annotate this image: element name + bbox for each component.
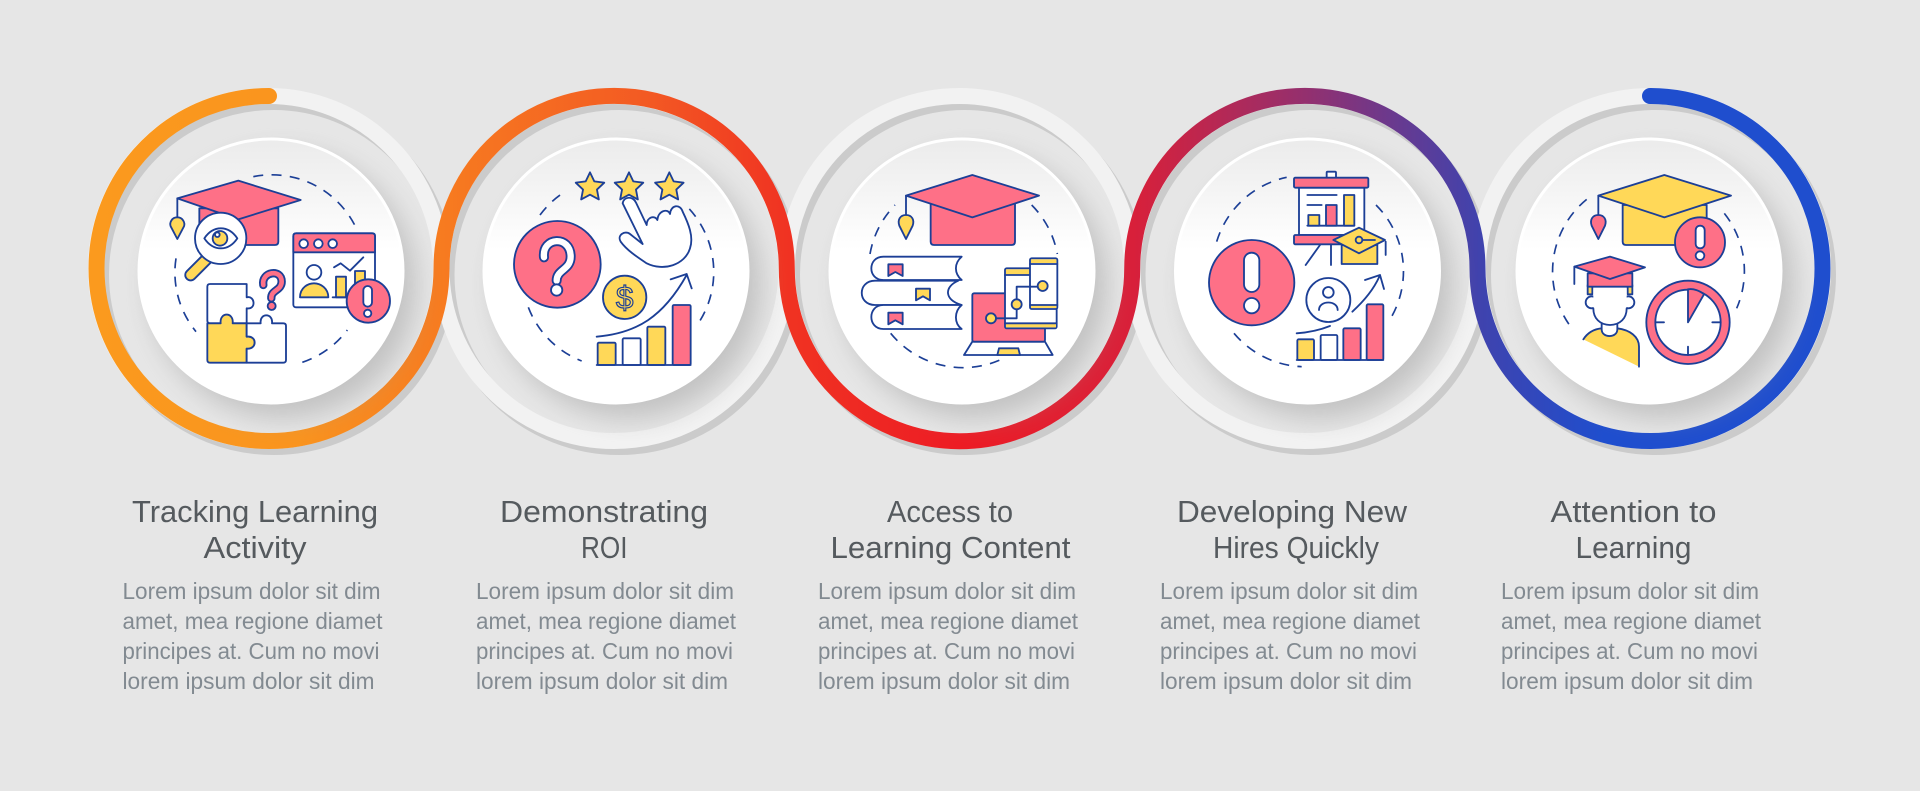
text block: step 5 description: amet, mea regione diamet	[1501, 608, 1762, 634]
text block: step 4 description: amet, mea regione diamet	[1160, 608, 1421, 634]
heading: Developing New Hires Quickly: Hires Quickly	[1213, 530, 1379, 565]
panel: step 3 access to learning content	[818, 139, 1107, 694]
loop track: pale rings with hard shadows	[96, 96, 1828, 447]
heading: Access to Learning Content	[830, 494, 1071, 565]
text block: step 2 description: principes at. Cum no movi	[476, 638, 733, 664]
text block: step 2 description: amet, mea regione diamet	[476, 608, 737, 634]
heading: Access to Learning Content: Learning Content	[830, 530, 1071, 565]
text block: step 3 description: amet, mea regione diamet	[818, 608, 1079, 634]
heading: Tracking Learning Activity: Activity	[204, 530, 307, 565]
heading: Developing New Hires Quickly	[1177, 494, 1408, 565]
panel: step 2 demonstrating ROI	[476, 139, 761, 694]
text block: step 4 description: lorem ipsum dolor sit dim	[1160, 668, 1412, 694]
heading: Attention to Learning	[1550, 494, 1716, 565]
text block: step 5 description: lorem ipsum dolor sit dim	[1501, 668, 1753, 694]
panel: step 5 attention to learning	[1501, 139, 1794, 694]
icon: alert, presentation board, person and bars	[1209, 172, 1403, 367]
text block: step 1 description: lorem ipsum dolor sit dim	[122, 668, 374, 694]
text block: step 3 description: Lorem ipsum dolor sit dim	[818, 578, 1076, 604]
panel: step 4 developing new hires quickly	[1160, 139, 1452, 694]
text block: step 1 description	[122, 578, 383, 694]
text block: step 4 description: Lorem ipsum dolor sit dim	[1160, 578, 1418, 604]
text block: step 2 description: Lorem ipsum dolor sit dim	[476, 578, 734, 604]
icon: stars, hand, coin and growth bars: $	[616, 280, 634, 316]
text block: step 4 description: principes at. Cum no movi	[1160, 638, 1417, 664]
text block: step 1 description: amet, mea regione diamet	[122, 608, 383, 634]
text block: step 5 description: Lorem ipsum dolor sit dim	[1501, 578, 1759, 604]
heading: Tracking Learning Activity: Tracking Learning	[132, 494, 378, 529]
text block: step 5 description	[1501, 578, 1762, 694]
heading: Developing New Hires Quickly: Developing New	[1177, 494, 1408, 529]
text block: step 5 description: principes at. Cum no movi	[1501, 638, 1758, 664]
heading: Access to Learning Content: Access to	[887, 494, 1013, 529]
gradient ribbon weaving through the five rings	[97, 96, 1823, 441]
icon: stars, hand, coin and growth bars	[514, 172, 714, 365]
text block: step 3 description	[818, 578, 1079, 694]
text block: step 2 description	[476, 578, 737, 694]
icon: cap, magnifier, browser and puzzle	[170, 175, 390, 363]
text block: step 4 description	[1160, 578, 1421, 694]
text block: step 3 description: principes at. Cum no movi	[818, 638, 1075, 664]
panel: step 1 tracking learning activity	[122, 139, 416, 694]
heading: Attention to Learning: Attention to	[1550, 494, 1716, 529]
text block: step 1 description: Lorem ipsum dolor sit dim	[122, 578, 380, 604]
text block: step 3 description: lorem ipsum dolor sit dim	[818, 668, 1070, 694]
icon: cap, books and devices	[862, 175, 1057, 368]
icon: cap, alert, student and clock	[1553, 175, 1744, 367]
heading: Tracking Learning Activity	[132, 494, 378, 565]
heading: Attention to Learning: Learning	[1576, 530, 1692, 565]
heading: Demonstrating ROI: ROI	[581, 530, 628, 565]
heading: Demonstrating ROI: Demonstrating	[500, 494, 708, 529]
text block: step 2 description: lorem ipsum dolor sit dim	[476, 668, 728, 694]
heading: Demonstrating ROI	[500, 494, 708, 565]
text block: step 1 description: principes at. Cum no movi	[122, 638, 380, 664]
